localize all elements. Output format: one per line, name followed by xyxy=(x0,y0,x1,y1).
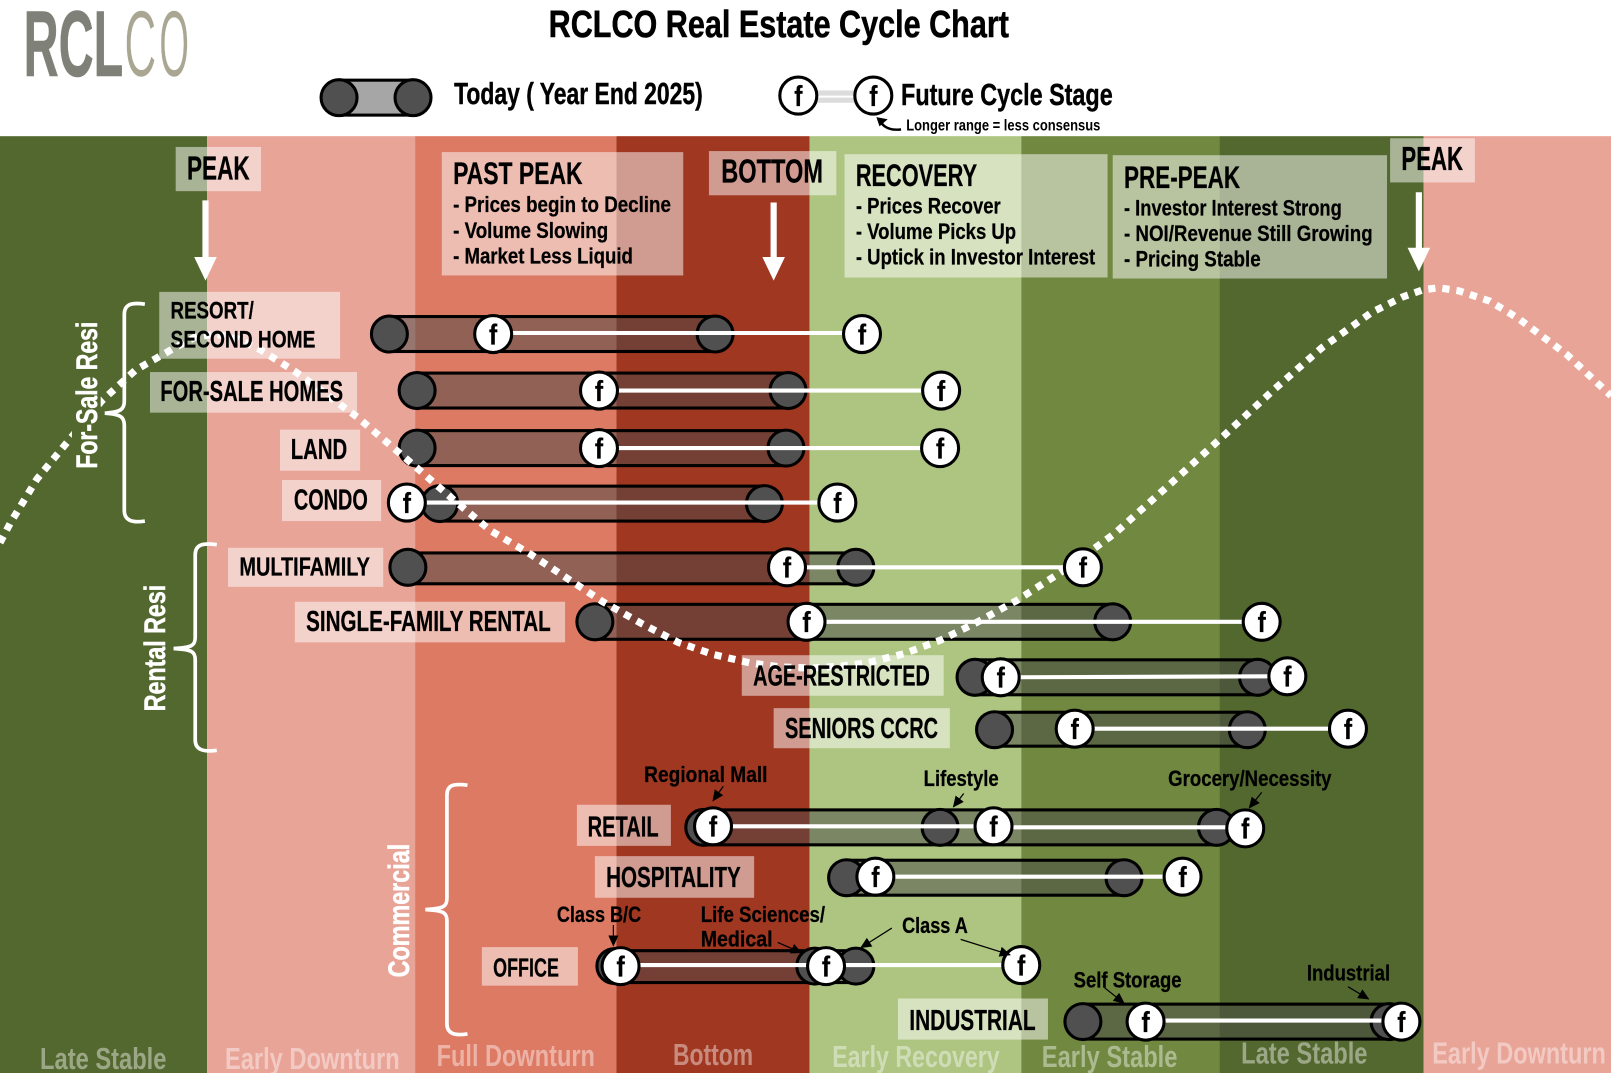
panel: pre-peak: - Investor Interest Strong xyxy=(1124,195,1342,220)
future range: retail: f xyxy=(989,812,998,844)
future range: for-sale homes xyxy=(580,372,960,409)
future range: land xyxy=(580,430,959,467)
label: age-restricted xyxy=(742,655,944,696)
future range: office: f xyxy=(1017,950,1026,982)
panel: pre-peak: PRE-PEAK xyxy=(1124,159,1240,195)
future range: condo xyxy=(388,484,856,521)
callout: regional mall xyxy=(644,762,767,801)
panel: recovery: RECOVERY xyxy=(856,157,977,193)
panel: past peak xyxy=(442,152,683,275)
future range: multifamily: f xyxy=(1079,553,1087,585)
capsule: for-sale homes xyxy=(399,373,806,409)
callout: life sciences / medical: Life Sciences/ xyxy=(701,902,825,927)
panel: past peak: - Market Less Liquid xyxy=(453,244,633,269)
callout: regional mall: Regional Mall xyxy=(644,762,767,787)
panel: recovery: - Prices Recover xyxy=(856,193,1001,218)
title: RCLCO Real Estate Cycle Chart xyxy=(549,4,1009,46)
label: industrial xyxy=(898,998,1048,1040)
capsule: land xyxy=(399,430,804,466)
future range: resort: f xyxy=(858,319,866,351)
future range: age-restricted xyxy=(982,658,1306,696)
label: rental resi: Rental Resi xyxy=(139,585,172,711)
brace: commercial xyxy=(425,785,467,1035)
label: for-sale resi: For-Sale Resi xyxy=(71,322,104,469)
future range: retail: f xyxy=(1241,814,1250,846)
legend: future label: Future Cycle Stage xyxy=(901,79,1113,112)
future range: seniors ccrc: f xyxy=(1071,714,1079,746)
future range: seniors ccrc: f xyxy=(1344,714,1352,746)
capsule: retail xyxy=(686,809,1234,845)
future range: industrial: f xyxy=(1397,1007,1406,1039)
callout: self storage: Self Storage xyxy=(1074,968,1182,993)
panel: past peak: PAST PEAK xyxy=(453,155,583,191)
future range: single-family rental: f xyxy=(1258,607,1266,639)
future range: condo: f xyxy=(403,488,411,520)
label: resort / second home: SECOND HOME xyxy=(171,326,315,353)
future range: for-sale homes: f xyxy=(595,376,603,408)
label: age-restricted: AGE-RESTRICTED xyxy=(753,660,930,692)
panel: past peak: - Volume Slowing xyxy=(453,218,608,243)
callout: industrial: Industrial xyxy=(1307,960,1390,986)
band labels: Early Recovery xyxy=(832,1039,1000,1073)
future range: land: f xyxy=(595,433,603,465)
legend: consensus note: Longer range = less consensus xyxy=(906,118,1100,135)
callout: class b/c: Class B/C xyxy=(557,902,641,927)
panel: recovery: - Uptick in Investor Interest xyxy=(856,245,1096,270)
callout: life sciences / medical: Medical xyxy=(701,927,773,952)
label: industrial: INDUSTRIAL xyxy=(909,1004,1036,1036)
capsule: resort xyxy=(371,316,733,352)
label: for-sale homes: FOR-SALE HOMES xyxy=(160,375,343,407)
peak label left xyxy=(176,147,261,191)
capsule: condo xyxy=(422,486,782,522)
panel: recovery xyxy=(845,154,1108,278)
future range: hospitality xyxy=(857,858,1201,895)
capsules: today ranges xyxy=(371,316,1407,1040)
future range: age-restricted: f xyxy=(997,663,1005,695)
label: single-family rental xyxy=(295,602,565,642)
bottom label: BOTTOM xyxy=(721,152,823,189)
label: seniors ccrc: SENIORS CCRC xyxy=(785,712,938,744)
label: multifamily: MULTIFAMILY xyxy=(239,552,370,582)
callout: self storage xyxy=(1074,968,1182,1003)
future range: condo: f xyxy=(833,488,842,520)
band labels: Late Stable xyxy=(1241,1036,1368,1071)
label: hospitality xyxy=(595,856,754,898)
future range: resort xyxy=(475,316,881,353)
future range: office xyxy=(602,947,1040,985)
label: office: OFFICE xyxy=(493,952,559,982)
future range: resort: f xyxy=(489,319,498,351)
panel: pre-peak: - Pricing Stable xyxy=(1124,247,1261,272)
future range: industrial: f xyxy=(1141,1007,1150,1039)
future range: retail xyxy=(695,808,1264,847)
callout: class b/c xyxy=(557,902,641,946)
label: resort / second home xyxy=(159,292,340,359)
panel: pre-peak xyxy=(1113,155,1387,279)
label: condo: CONDO xyxy=(294,483,368,515)
capsule: multifamily xyxy=(390,549,874,585)
panel: recovery: - Volume Picks Up xyxy=(856,219,1016,244)
future range: land: f xyxy=(936,433,945,465)
label: multifamily xyxy=(228,548,383,587)
panel: pre-peak: - NOI/Revenue Still Growing xyxy=(1124,221,1373,246)
future range: seniors ccrc xyxy=(1056,710,1366,747)
callout: class a: Class A xyxy=(902,913,968,938)
future range: single-family rental: f xyxy=(802,607,811,639)
label: resort / second home: RESORT/ xyxy=(171,298,254,325)
legend: today capsule xyxy=(321,80,431,116)
callout: grocery/necessity xyxy=(1168,766,1332,808)
callout: lifestyle: Lifestyle xyxy=(924,766,999,791)
callout: lifestyle xyxy=(924,766,999,807)
label: condo xyxy=(282,480,381,521)
panel: past peak: - Prices begin to Decline xyxy=(453,192,671,217)
chart: dotted cycle curve xyxy=(0,288,1611,668)
label: office xyxy=(482,947,578,986)
legend: today label: Today ( Year End 2025) xyxy=(454,78,703,111)
peak label right xyxy=(1390,138,1475,182)
capsule: office xyxy=(597,948,874,984)
arrow: peak left xyxy=(194,200,217,281)
label: retail: RETAIL xyxy=(588,811,659,843)
callout: life sciences / medical xyxy=(701,902,825,953)
future range: office: f xyxy=(616,951,625,983)
arrow: peak right xyxy=(1408,192,1430,271)
callout: industrial xyxy=(1307,960,1390,999)
band labels: Early Stable xyxy=(1042,1039,1177,1073)
future range: for-sale homes: f xyxy=(937,376,946,408)
legend: future cycle stage symbol: f xyxy=(869,81,878,113)
callout: class a xyxy=(861,913,1010,955)
future range: hospitality: f xyxy=(871,862,880,894)
peak label left: PEAK xyxy=(187,149,250,186)
capsule: age-restricted xyxy=(957,659,1276,695)
label: for-sale homes xyxy=(150,372,357,413)
label: land xyxy=(280,430,360,471)
band labels: Full Downturn xyxy=(437,1038,595,1073)
label: retail xyxy=(577,805,671,846)
band labels xyxy=(40,1036,1606,1073)
legend: future cycle stage symbol xyxy=(780,77,892,114)
capsule: single-family rental xyxy=(577,604,1131,640)
band labels: Bottom xyxy=(673,1037,753,1072)
brace: for-sale resi xyxy=(105,304,145,522)
legend: future cycle stage symbol: f xyxy=(794,81,803,113)
future range: office: f xyxy=(822,951,831,983)
capsule: hospitality xyxy=(829,860,1142,896)
future range: single-family rental xyxy=(788,603,1280,640)
label: commercial: Commercial xyxy=(383,844,416,977)
peak label right: PEAK xyxy=(1401,140,1463,177)
label: land: LAND xyxy=(291,433,347,465)
legend: consensus note arrow xyxy=(876,117,901,130)
future range: multifamily: f xyxy=(783,553,791,585)
label: single-family rental: SINGLE-FAMILY RENTAL xyxy=(306,605,551,637)
future range: multifamily xyxy=(769,549,1101,586)
future range: hospitality: f xyxy=(1178,862,1187,894)
callout: grocery/necessity: Grocery/Necessity xyxy=(1168,766,1332,791)
capsule: seniors ccrc xyxy=(977,712,1265,748)
label: seniors ccrc xyxy=(774,708,950,748)
arrow: bottom xyxy=(762,202,785,281)
brace: rental resi xyxy=(174,544,217,751)
capsule: industrial xyxy=(1065,1004,1407,1040)
future range: industrial xyxy=(1127,1003,1420,1040)
future range: retail: f xyxy=(709,812,717,844)
label: hospitality: HOSPITALITY xyxy=(606,861,741,893)
bottom label xyxy=(709,151,836,195)
future range: age-restricted: f xyxy=(1283,662,1292,694)
